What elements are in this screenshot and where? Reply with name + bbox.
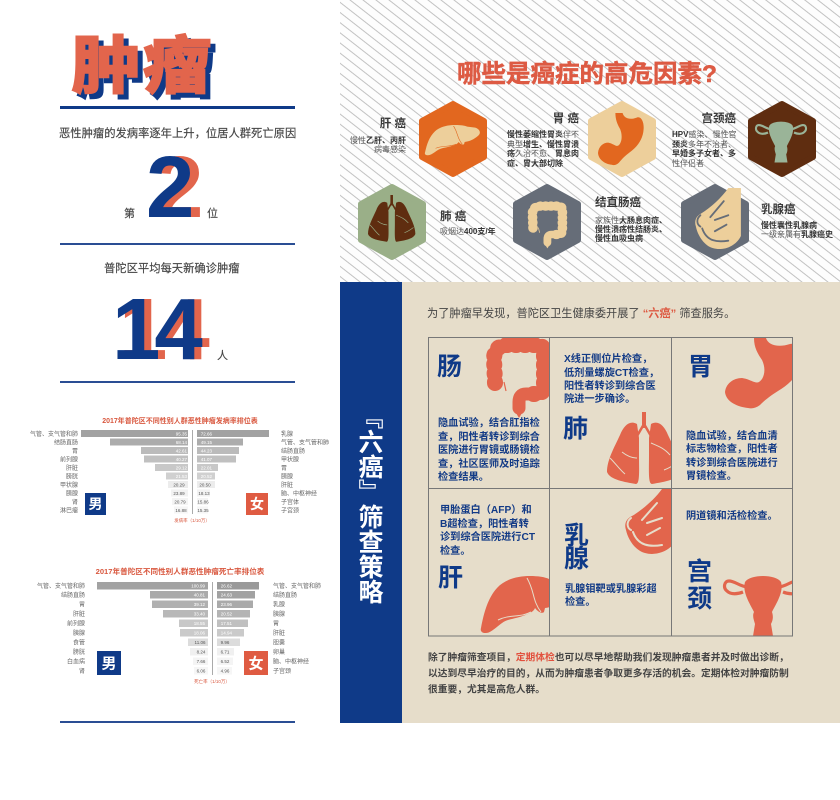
chart title: 2017年普陀区不同性别人群恶性肿瘤死亡率排位表 xyxy=(96,566,265,576)
risk: colorectal cancer: 慢性溃疡性结肠炎、 xyxy=(595,224,667,234)
male category labels: 结肠直肠 xyxy=(61,591,85,599)
value labels: 40.81 xyxy=(194,592,205,598)
female category labels: 胆囊 xyxy=(273,638,285,646)
risk: lung cancer: 吸烟达400支/年 xyxy=(440,226,496,236)
value labels: 11.06 xyxy=(195,640,206,645)
value labels: 18.13 xyxy=(198,491,210,496)
value labels: 20.50 xyxy=(199,482,211,488)
risk: stomach cancer: 胃 癌 xyxy=(553,111,579,125)
grid cell: stomach: 转诊到综合医院进行 xyxy=(686,456,778,469)
grid cell: stomach: 胃镜检查。 xyxy=(686,469,737,482)
grid cell: bowel: 查，阳性者转诊到综合 xyxy=(438,430,540,443)
value labels: 15.35 xyxy=(197,508,209,513)
grid lines xyxy=(428,337,793,636)
male category labels: 胃 xyxy=(72,448,78,455)
grid cell: liver: 甲胎蛋白（AFP）和 xyxy=(440,503,532,516)
grid cell: lung xyxy=(563,352,681,484)
grid cell: liver: 肝 xyxy=(438,564,463,592)
value labels: 24.63 xyxy=(221,592,232,598)
value labels: 33.40 xyxy=(194,612,205,616)
female badge xyxy=(244,651,268,675)
value labels: 44.23 xyxy=(201,448,212,454)
intro text: 为了肿瘤早发现，普陀区卫生健康委开展了 “六癌” 筛查服务。 xyxy=(427,306,735,320)
risk: breast cancer: 一级亲属有乳腺癌史 xyxy=(761,229,833,239)
male category labels xyxy=(30,430,78,514)
female category labels: 子宫体 xyxy=(281,498,299,506)
risk: liver cancer: 慢性乙肝、丙肝 xyxy=(350,135,406,145)
title: 肿瘤: 肿瘤 xyxy=(77,36,219,106)
value labels xyxy=(173,432,212,513)
male category labels: 甲状腺 xyxy=(60,481,78,489)
risk: colorectal cancer: 家族性大肠息肉症、 xyxy=(595,215,667,225)
value labels: 18.55 xyxy=(194,621,205,626)
female category labels: 子宫颈 xyxy=(273,667,291,675)
female category labels: 气管、支气管和肺 xyxy=(273,582,321,590)
grid cell: bowel: 隐血试验，结合肛指检 xyxy=(438,416,540,429)
chart: 2017 mortality rank by sex xyxy=(37,566,321,685)
closing text: 除了肿瘤筛查项目，定期体检也可以尽早地帮助我们发现肿瘤患者并及时做出诊断， xyxy=(428,650,789,664)
female category labels xyxy=(281,430,329,514)
female category labels: 子宫颈 xyxy=(281,506,299,514)
stat: rank 2: 2 xyxy=(155,139,203,236)
value labels: 42.61 xyxy=(176,448,187,454)
value labels: 6.71 xyxy=(221,650,230,654)
female category labels: 胰腺 xyxy=(281,472,293,480)
male category labels: 食管 xyxy=(73,638,85,646)
risk: breast cancer: 慢性囊性乳腺病 xyxy=(761,220,817,230)
grid cell: cervix: 颈 xyxy=(687,585,712,613)
value labels: 68.14 xyxy=(176,440,187,445)
grid cell: breast: 乳 xyxy=(564,522,589,550)
grid cell: bowel: 查，社区医师及时追踪 xyxy=(438,457,541,470)
male category labels: 气管、支气管和肺 xyxy=(37,582,85,590)
value labels: 20.52 xyxy=(221,612,232,616)
closing text: 很重要，尤其是高危人群。 xyxy=(428,682,545,696)
panel: six-cancer screening sidebar xyxy=(340,282,402,723)
grid cell: cervix xyxy=(686,509,801,636)
risk: breast cancer: 乳腺癌 xyxy=(761,202,796,216)
male bars xyxy=(97,582,208,674)
female category labels: 脑、中枢神经 xyxy=(281,490,317,498)
panel: six-cancer screening sidebar: 『六癌』筛查策略 xyxy=(355,404,384,604)
grid cell: lung: 肺 xyxy=(563,415,588,443)
value labels: 9.96 xyxy=(221,640,230,645)
axis note: 死亡率（1/10万） xyxy=(194,678,230,685)
title: 肿瘤: 肿瘤 xyxy=(72,31,214,101)
heading: risk factors: 哪些是癌症的高危因素? xyxy=(457,59,717,88)
grid cell: breast: 腺 xyxy=(564,545,589,573)
risk: liver cancer: 肝 癌 xyxy=(380,116,406,130)
value labels: 14.94 xyxy=(221,630,232,636)
grid cell: lung: 院进一步确诊。 xyxy=(564,392,635,405)
risk: stomach cancer: 典型增生、慢性胃溃 xyxy=(507,139,579,149)
female badge xyxy=(246,493,268,515)
risk: colorectal cancer: 慢性血吸虫病 xyxy=(595,233,643,243)
value labels: 6.52 xyxy=(221,659,230,664)
male category labels: 白血病 xyxy=(67,658,85,666)
value labels: 7.66 xyxy=(197,659,206,664)
stat: rank 2: 2 xyxy=(146,139,194,236)
grid cell: cervix: 宫 xyxy=(687,558,712,586)
grid cell: breast xyxy=(564,489,676,608)
value labels: 21.53 xyxy=(176,474,187,479)
stat: 14 people: 14 xyxy=(119,281,209,378)
stat: rank 2 xyxy=(124,139,218,236)
female category labels: 结肠直肠 xyxy=(273,591,297,599)
grid cell: stomach: 胃 xyxy=(688,353,713,381)
male category labels: 前列腺 xyxy=(60,456,78,464)
grid cell: bowel xyxy=(437,345,544,483)
female badge: 女 xyxy=(248,654,264,672)
male category labels: 胃 xyxy=(79,602,85,608)
stat text: mortality rank description: 恶性肿瘤的发病率逐年上升，位居人群死亡原因 xyxy=(59,126,296,140)
value labels: 72.66 xyxy=(201,432,212,436)
risk: stomach cancer: 疡久治不愈、胃息肉 xyxy=(507,148,579,158)
male badge xyxy=(97,651,121,675)
closing text: 以达到尽早治疗的目的，从而为肿瘤患者争取更多存活的机会。定期体检对肿瘤防制 xyxy=(428,666,789,680)
value labels: 40.27 xyxy=(176,457,187,462)
male category labels: 气管、支气管和肺 xyxy=(30,430,78,438)
male category labels: 淋巴瘤 xyxy=(60,506,78,514)
value labels: 22.01 xyxy=(201,466,212,470)
value labels: 100.99 xyxy=(191,584,205,588)
female category labels: 乳腺 xyxy=(281,430,293,438)
value labels: 26.62 xyxy=(221,584,232,588)
risk: lung cancer xyxy=(361,187,496,257)
female category labels xyxy=(273,582,321,675)
female category labels: 脑、中枢神经 xyxy=(273,658,309,666)
chart title: 2017年普陀区不同性别人群恶性肿瘤发病率排位表 xyxy=(102,416,258,425)
grid cell: breast: 乳腺钼靶或乳腺彩超 xyxy=(565,582,657,595)
stat: rank 2: 位 xyxy=(207,206,218,220)
male category labels: 结肠直肠 xyxy=(54,438,78,446)
male category labels: 胰腺 xyxy=(66,490,78,498)
grid cell: stomach: 隐血试验，结合血清 xyxy=(686,429,778,442)
grid cell: lung: X线正侧位片检查， xyxy=(564,352,652,365)
grid cell: liver: 检查。 xyxy=(440,544,471,557)
stat: 14 people: 人 xyxy=(217,349,228,362)
female category labels: 肝脏 xyxy=(273,629,285,637)
panel: screening content xyxy=(402,282,840,723)
value labels: 49.15 xyxy=(201,440,212,445)
male category labels: 膀胱 xyxy=(66,472,78,480)
value labels: 16.88 xyxy=(175,508,187,513)
risk: breast cancer xyxy=(684,187,833,257)
male category labels: 肾 xyxy=(72,498,78,506)
closing text xyxy=(428,650,789,696)
risk: liver cancer: 病毒感染 xyxy=(374,144,406,154)
axis note: 发病率（1/10万） xyxy=(174,517,210,524)
value labels: 39.12 xyxy=(194,602,205,607)
chart: 2017 incidence rank by sex xyxy=(30,416,329,524)
risk: stomach cancer xyxy=(507,104,653,174)
female category labels: 甲状腺 xyxy=(281,456,299,464)
value labels xyxy=(191,584,232,674)
grid cell: liver: B超检查，阳性者转 xyxy=(440,517,529,530)
risk: stomach cancer: 症、胃大部切除 xyxy=(507,158,563,168)
risk: liver cancer xyxy=(350,104,484,174)
female category labels: 结肠直肠 xyxy=(281,447,305,455)
male category labels: 肾 xyxy=(79,667,85,675)
male badge xyxy=(85,493,106,515)
stat: rank 2: 第 xyxy=(124,206,135,220)
grid cell: liver xyxy=(438,504,549,633)
grid cell: bowel: 检查结果。 xyxy=(438,470,489,483)
risk: cervical cancer: 早婚多子女者、多 xyxy=(672,148,736,158)
grid cell: cervix: 阴道镜和活检检查。 xyxy=(686,509,778,522)
female category labels: 气管、支气管和肺 xyxy=(281,438,329,446)
risk: stomach cancer: 慢性萎缩性胃炎伴不 xyxy=(507,129,579,139)
value labels: 8.24 xyxy=(197,650,206,654)
value labels: 18.06 xyxy=(194,630,205,636)
female category labels: 胃 xyxy=(273,620,279,628)
female category labels: 肝脏 xyxy=(281,481,293,489)
risk: cervical cancer: 颈炎多年不治者、 xyxy=(672,139,736,149)
male badge: 男 xyxy=(88,496,102,512)
value labels: 95.35 xyxy=(176,432,187,436)
grid cell: stomach xyxy=(686,338,801,482)
female category labels: 胃 xyxy=(281,465,287,472)
risk: cervical cancer xyxy=(672,104,813,174)
male category labels: 肝脏 xyxy=(66,464,78,472)
value labels: 6.06 xyxy=(197,668,206,674)
value labels: 29.12 xyxy=(176,466,187,470)
grid cell: bowel: 肠 xyxy=(437,353,462,381)
male category labels: 前列腺 xyxy=(67,620,85,628)
value labels: 15.86 xyxy=(197,500,209,504)
male category labels xyxy=(37,582,85,675)
value labels: 20.52 xyxy=(201,474,212,479)
female category labels: 卵巢 xyxy=(273,648,285,656)
value labels: 20.29 xyxy=(173,482,185,488)
grid cell: bowel: 医院进行胃镜或肠镜检 xyxy=(438,443,540,456)
grid cell: breast: 检查。 xyxy=(565,595,596,608)
value labels: 4.96 xyxy=(221,668,230,674)
stat text: daily new cases description: 普陀区平均每天新确诊肿瘤 xyxy=(104,261,240,275)
male category labels: 膀胱 xyxy=(73,648,85,656)
male category labels: 肝脏 xyxy=(73,610,85,618)
risk: colorectal cancer xyxy=(516,187,667,257)
risk: colorectal cancer: 结直肠癌 xyxy=(595,195,641,209)
risk: cervical cancer: 性伴侣者 xyxy=(672,158,704,168)
male badge: 男 xyxy=(101,656,117,672)
grid cell: lung: 阳性者转诊到综合医 xyxy=(564,379,656,392)
value labels: 23.96 xyxy=(221,602,232,607)
grid cell: lung: 低剂量螺旋CT检查， xyxy=(564,366,659,379)
female bars xyxy=(197,430,269,514)
male bars xyxy=(81,430,188,514)
risk: cervical cancer: 宫颈癌 xyxy=(702,111,736,125)
value labels: 41.07 xyxy=(201,457,212,462)
risk: lung cancer: 肺 癌 xyxy=(440,209,467,223)
value labels: 17.51 xyxy=(221,621,232,626)
panel: risk factors xyxy=(340,0,840,282)
grid cell: stomach: 标志物检查，阳性者 xyxy=(686,442,778,455)
male category labels: 胰腺 xyxy=(73,629,85,637)
female category labels: 胰腺 xyxy=(273,610,285,618)
female badge: 女 xyxy=(250,496,264,512)
female bars xyxy=(217,582,259,674)
value labels: 23.89 xyxy=(173,491,185,496)
value labels: 20.79 xyxy=(174,500,186,504)
stat: 14 people: 14 xyxy=(112,281,202,378)
risk: cervical cancer: HPV感染、慢性宫 xyxy=(672,129,736,139)
female category labels: 乳腺 xyxy=(273,600,285,608)
grid cell: liver: 诊到综合医院进行CT xyxy=(440,530,536,543)
